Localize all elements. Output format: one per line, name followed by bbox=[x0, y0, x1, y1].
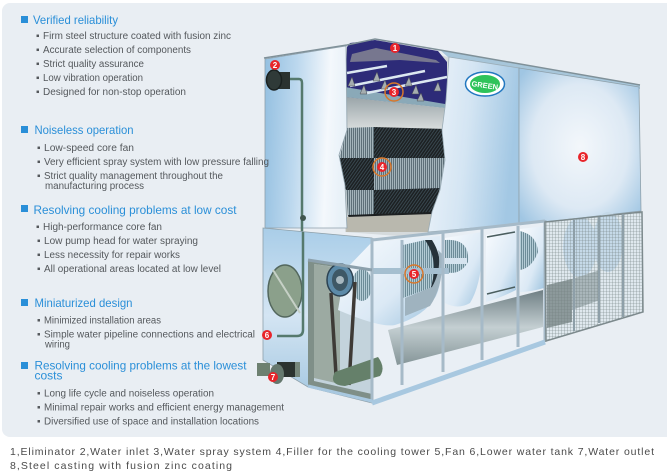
upper left panel bbox=[265, 46, 347, 228]
section: verified reliability: Accurate selection of components bbox=[43, 45, 191, 56]
filler for the cooling tower bbox=[339, 127, 447, 232]
section: resolving cooling problems at low cost: ▪ bbox=[37, 250, 41, 261]
section: resolving cooling problems at the lowest costs: Resolving cooling problems at the lowest bbox=[34, 358, 247, 372]
upper middle panel bbox=[428, 57, 519, 232]
water outlet bbox=[257, 362, 300, 384]
section: resolving cooling problems at low cost: ▪ bbox=[36, 222, 40, 233]
section: miniaturized design bbox=[21, 296, 255, 350]
text column: features bbox=[21, 13, 284, 428]
section: verified reliability: ▪ bbox=[36, 59, 40, 70]
section: resolving cooling problems at low cost: ▪ bbox=[37, 236, 41, 247]
lower module: left face bbox=[263, 228, 372, 403]
marker 2 bbox=[270, 60, 280, 70]
marker 4: 4 bbox=[380, 163, 385, 172]
marker 5: 5 bbox=[412, 270, 417, 279]
section: noiseless operation: manufacturing process bbox=[45, 181, 144, 192]
section: resolving cooling problems at the lowest costs: Long life cycle and noiseless operation bbox=[44, 388, 214, 400]
section: resolving cooling problems at low cost: Low pump head for water spraying bbox=[44, 236, 198, 247]
cooling tower illustration bbox=[257, 39, 643, 403]
logo: GREEN: GREEN bbox=[471, 79, 499, 92]
upper module: interior opening bbox=[345, 40, 452, 240]
caption: parts legend: 1,Eliminator 2,Water inlet 3,Water spray system 4,Filler for the cooling tower 5,Fan 6,Lower water tank 7,Water outlet bbox=[10, 446, 654, 458]
section: verified reliability: ▪ bbox=[36, 73, 40, 84]
logo: GREEN bbox=[466, 72, 504, 96]
water inlet pipe and flange bbox=[266, 70, 306, 232]
upper right panel bbox=[519, 68, 641, 225]
section: verified reliability: ▪ bbox=[36, 31, 40, 42]
marker 6 bbox=[262, 330, 272, 340]
section: resolving cooling problems at the lowest costs: ▪ bbox=[37, 402, 41, 414]
marker 1: 1 bbox=[393, 44, 398, 53]
section: verified reliability: Verified reliability bbox=[33, 13, 118, 27]
left fan access door bbox=[268, 265, 302, 317]
section: resolving cooling problems at low cost: All operational areas located at low level bbox=[44, 264, 221, 275]
section: noiseless operation: ▪ bbox=[37, 157, 41, 168]
section: noiseless operation: Low-speed core fan bbox=[44, 143, 134, 154]
section: verified reliability: Strict quality assurance bbox=[43, 59, 144, 70]
section: verified reliability: ▪ bbox=[36, 87, 40, 98]
marker 8 bbox=[578, 152, 588, 162]
section: noiseless operation: ▪ bbox=[37, 143, 41, 154]
section: verified reliability: Firm steel structure coated with fusion zinc bbox=[43, 31, 231, 42]
section: verified reliability: ▪ bbox=[36, 45, 40, 56]
caption: parts legend: 8,Steel casting with fusion zinc coating bbox=[10, 460, 232, 472]
section: resolving cooling problems at low cost: High-performance core fan bbox=[43, 222, 162, 233]
callout markers bbox=[262, 43, 588, 382]
section: resolving cooling problems at low cost: Less necessity for repair works bbox=[44, 250, 180, 261]
marker 3 bbox=[385, 83, 403, 101]
water tank pipe bbox=[277, 232, 303, 336]
section: resolving cooling problems at low cost: Resolving cooling problems at low cost bbox=[34, 203, 237, 217]
marker 6: 6 bbox=[265, 331, 270, 340]
fan housings bbox=[338, 226, 545, 325]
wire mesh guards bbox=[545, 212, 643, 341]
section: resolving cooling problems at the lowest costs: costs bbox=[34, 368, 62, 382]
section: noiseless operation: Very efficient spray system with low pressure falling bbox=[44, 157, 269, 168]
section: verified reliability bbox=[21, 13, 231, 98]
top lip of casing bbox=[264, 39, 640, 89]
section: resolving cooling problems at low cost bbox=[21, 203, 237, 275]
section: resolving cooling problems at the lowest costs: ▪ bbox=[37, 416, 41, 428]
marker 7: 7 bbox=[271, 373, 276, 382]
section: verified reliability: Designed for non-stop operation bbox=[43, 87, 186, 98]
section: noiseless operation: ▪ bbox=[37, 171, 41, 182]
section: noiseless operation bbox=[21, 123, 269, 192]
caption: parts legend bbox=[10, 446, 654, 472]
section: miniaturized design: wiring bbox=[44, 340, 70, 350]
marker 4 bbox=[373, 158, 391, 176]
lower module: fan side background bbox=[372, 222, 545, 403]
marker 3: 3 bbox=[392, 88, 397, 97]
section: miniaturized design: ▪ bbox=[37, 330, 41, 340]
marker 5 bbox=[405, 265, 423, 283]
section: verified reliability: Low vibration operation bbox=[43, 73, 143, 84]
section: miniaturized design: Minimized installation areas bbox=[44, 316, 161, 326]
marker 2: 2 bbox=[273, 61, 278, 70]
section: resolving cooling problems at the lowest costs: ▪ bbox=[37, 388, 41, 400]
marker 7 bbox=[268, 372, 278, 382]
section: noiseless operation: Strict quality management throughout the bbox=[44, 171, 223, 182]
marker 1 bbox=[390, 43, 400, 53]
section: resolving cooling problems at low cost: ▪ bbox=[37, 264, 41, 275]
marker 8: 8 bbox=[581, 153, 586, 162]
section: resolving cooling problems at the lowest costs: Diversified use of space and installation locations bbox=[44, 416, 259, 428]
section: miniaturized design: Simple water pipeline connections and electrical bbox=[44, 330, 255, 340]
section: resolving cooling problems at the lowest costs bbox=[21, 358, 284, 428]
motor and belt drive bbox=[327, 264, 383, 386]
section: miniaturized design: ▪ bbox=[37, 316, 41, 326]
section: resolving cooling problems at the lowest costs: Minimal repair works and efficient energy management bbox=[44, 402, 284, 414]
steel frame bbox=[308, 220, 545, 403]
section: noiseless operation: Noiseless operation bbox=[34, 123, 134, 137]
section: miniaturized design: Miniaturized design bbox=[34, 296, 132, 310]
